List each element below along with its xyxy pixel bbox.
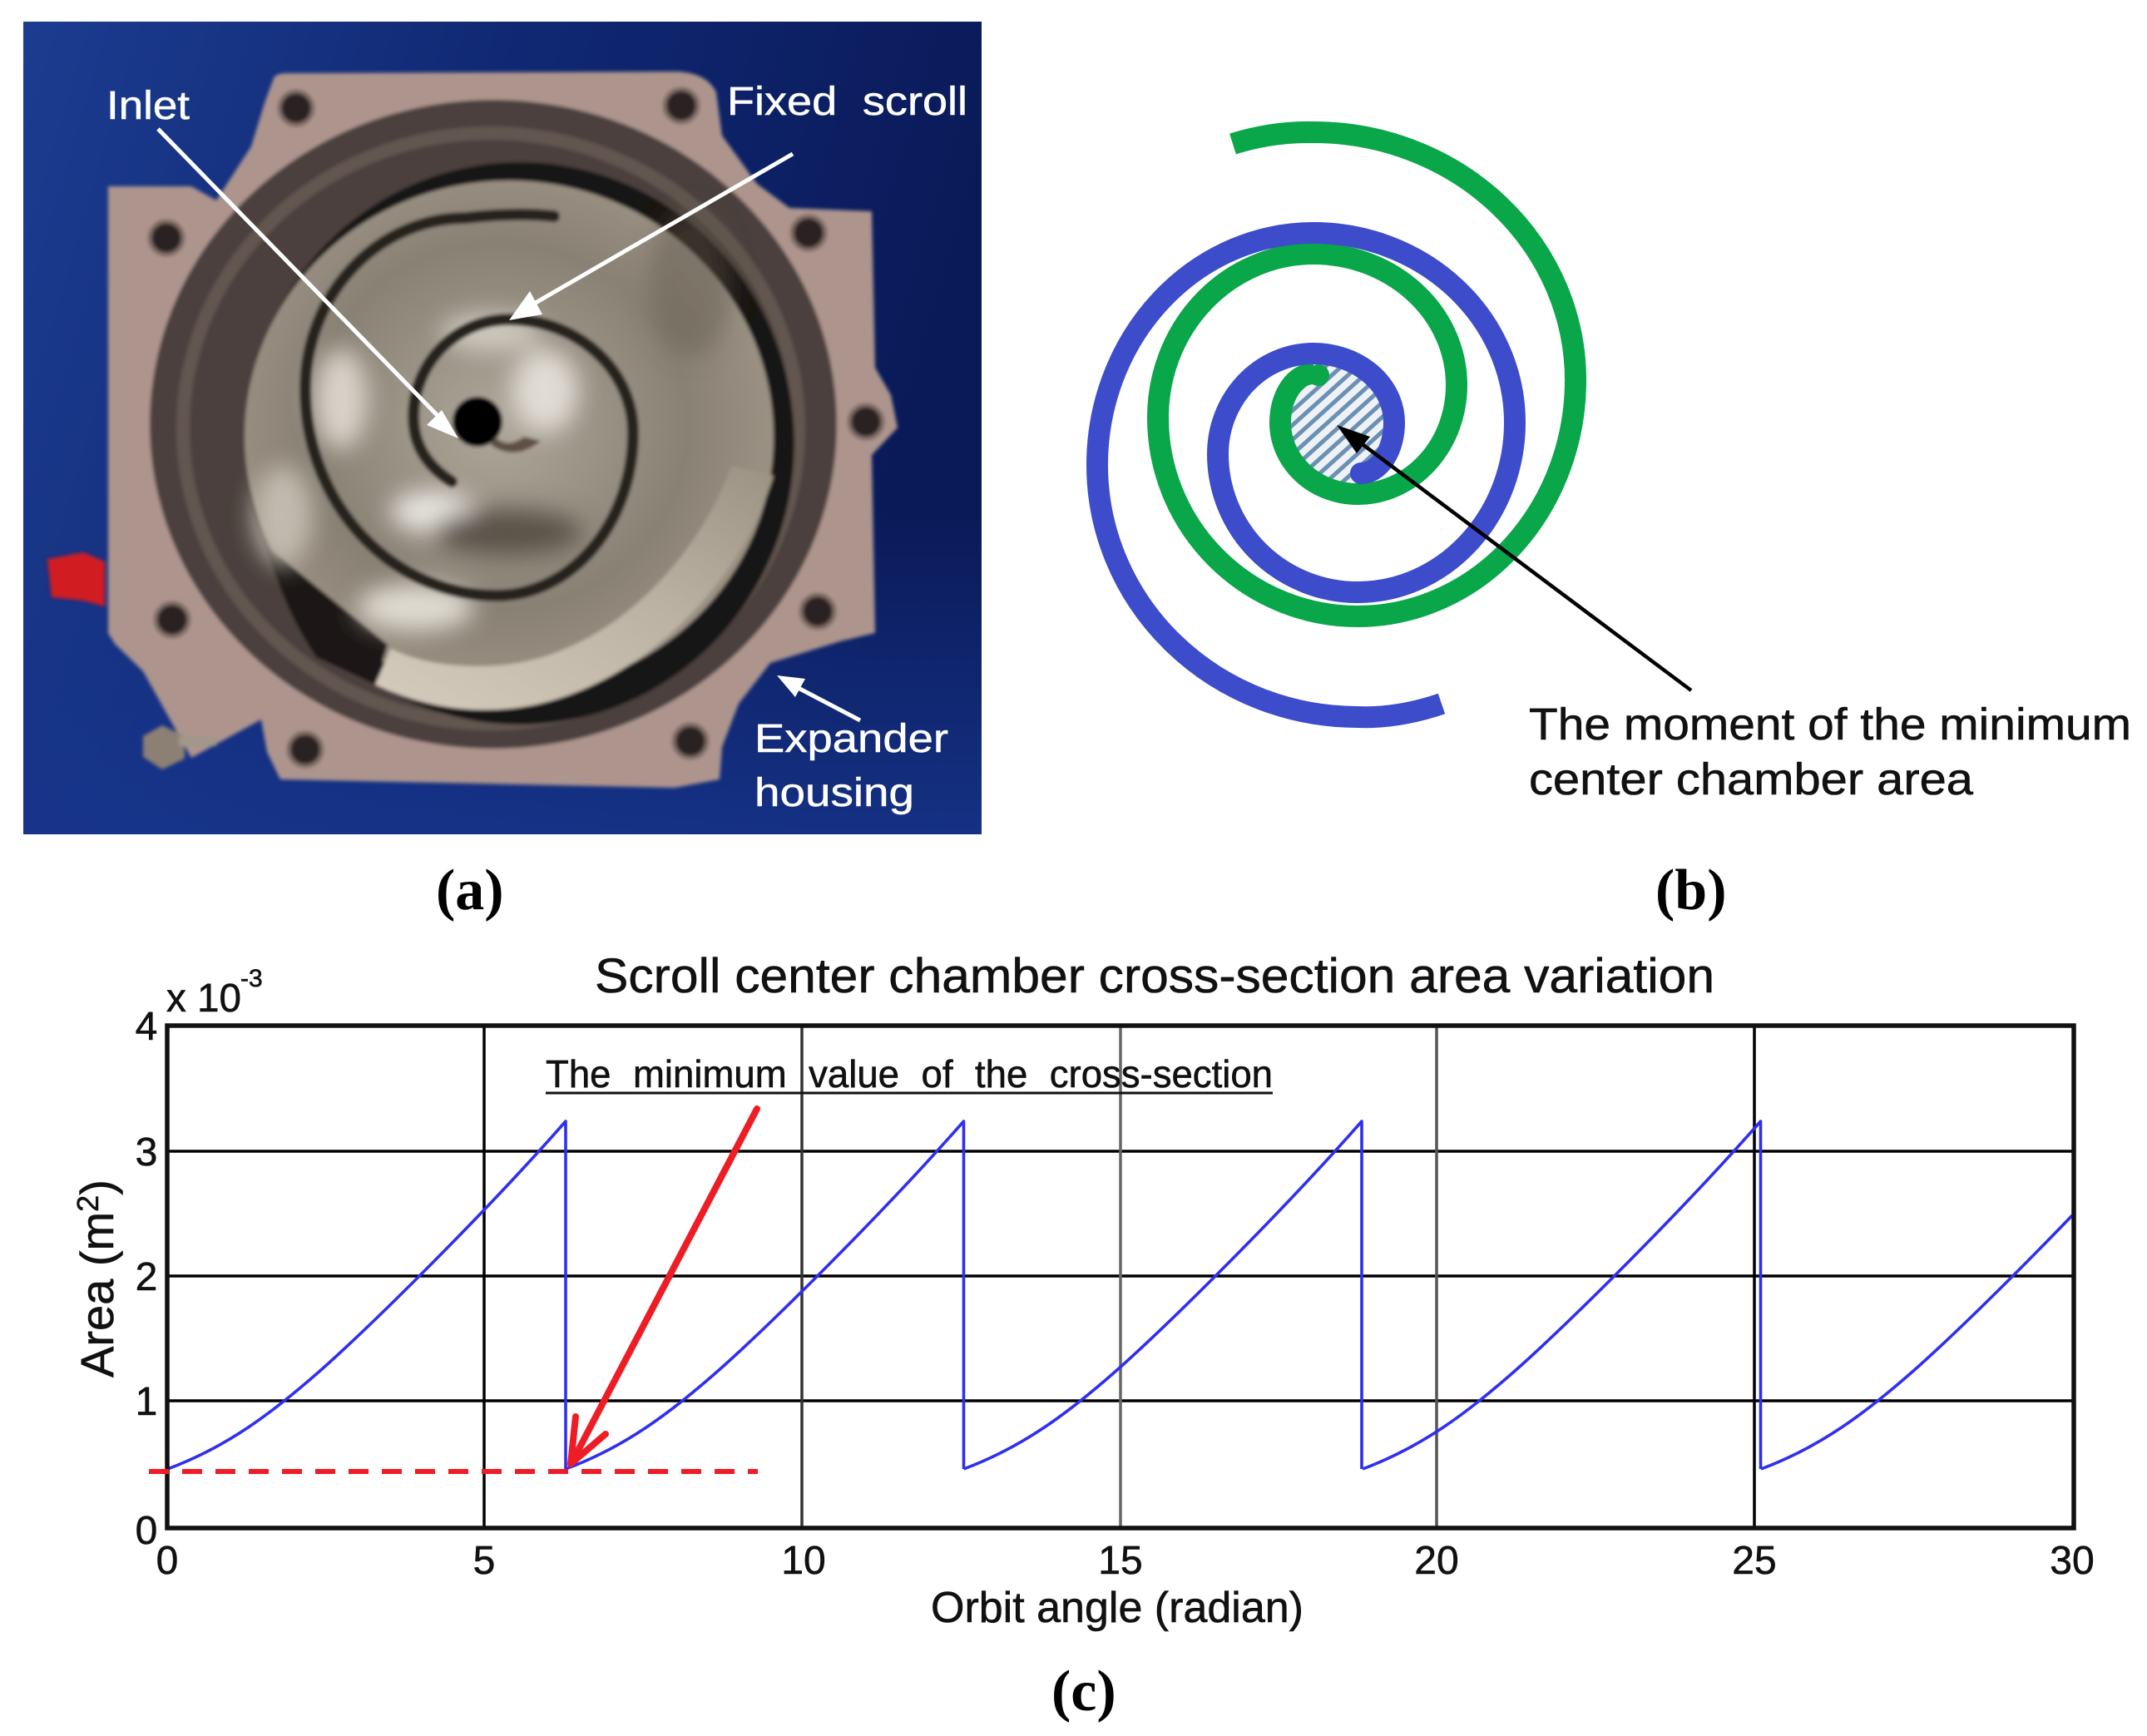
x axis ticks: 0	[156, 1539, 178, 1583]
label: Expander housing: housing	[754, 771, 914, 815]
exponent label	[166, 965, 263, 1021]
lower left cut	[267, 547, 388, 685]
y axis ticks: 2	[136, 1255, 157, 1299]
x axis ticks: 15	[1098, 1539, 1143, 1583]
chart title: Scroll center chamber cross-section area variation	[595, 949, 1714, 1003]
arrow to center chamber	[1337, 425, 1691, 690]
y axis ticks: 3	[136, 1130, 157, 1175]
annotation text	[1529, 700, 2131, 804]
center inlet hole	[453, 397, 502, 447]
inlet tip detail	[491, 437, 541, 453]
y axis ticks: 0	[136, 1509, 157, 1553]
outer crescent	[375, 466, 774, 710]
x axis ticks: 5	[473, 1539, 495, 1583]
x axis ticks: 10	[781, 1539, 826, 1583]
x axis ticks	[156, 1539, 2095, 1583]
blue orbiting scroll	[1097, 233, 1515, 717]
y axis title: Area (m	[71, 1212, 123, 1377]
x axis ticks: 30	[2050, 1539, 2095, 1583]
plot frame	[167, 1026, 2074, 1528]
metal highlights	[254, 208, 732, 631]
label: Inlet	[106, 84, 458, 438]
label: Inlet: Inlet	[106, 84, 190, 128]
red dashed minimum line	[149, 1469, 758, 1474]
caption (c): (c)	[1051, 1659, 1116, 1724]
label: Fixed scroll	[509, 80, 967, 320]
green fixed scroll	[1158, 132, 1576, 616]
label: Fixed scroll: Fixed scroll	[727, 80, 967, 124]
exponent label: x 10	[166, 977, 241, 1021]
label: Expander housing	[754, 675, 948, 815]
red arrow	[571, 1109, 757, 1464]
y axis ticks: 1	[136, 1380, 157, 1424]
red clip	[47, 552, 105, 606]
housing casting	[108, 72, 898, 788]
y axis title: )	[71, 1180, 123, 1195]
y axis ticks	[136, 1005, 157, 1553]
mounting holes	[150, 89, 883, 766]
minimum value annotation: The minimum value of the cross-section	[546, 1052, 1273, 1096]
photo background	[23, 22, 982, 834]
exponent label: -3	[240, 965, 263, 992]
panel b: scroll spiral diagram	[1097, 132, 2131, 804]
caption (b): (b)	[1655, 858, 1727, 922]
spiral groove	[305, 215, 633, 596]
side bolt	[143, 725, 216, 769]
scroll base plate	[245, 181, 774, 693]
panel a: expander photograph	[23, 22, 982, 834]
blue area curve	[168, 1121, 2147, 1469]
y axis ticks: 4	[136, 1005, 157, 1049]
label: Expander housing: Expander	[754, 717, 948, 761]
annotation text: center chamber area	[1529, 754, 1974, 804]
x axis ticks: 20	[1414, 1539, 1459, 1583]
caption (a): (a)	[436, 858, 504, 922]
grid lines	[167, 1026, 2074, 1528]
x axis ticks: 25	[1732, 1539, 1777, 1583]
x axis title: Orbit angle (radian)	[931, 1584, 1304, 1632]
panel c: area variation chart	[71, 949, 2147, 1632]
hatched center chamber	[1287, 361, 1387, 484]
expander body	[47, 72, 898, 788]
annotation text: The moment of the minimum	[1529, 700, 2131, 749]
y axis title: 2	[71, 1195, 105, 1212]
housing inner wall	[150, 100, 837, 749]
